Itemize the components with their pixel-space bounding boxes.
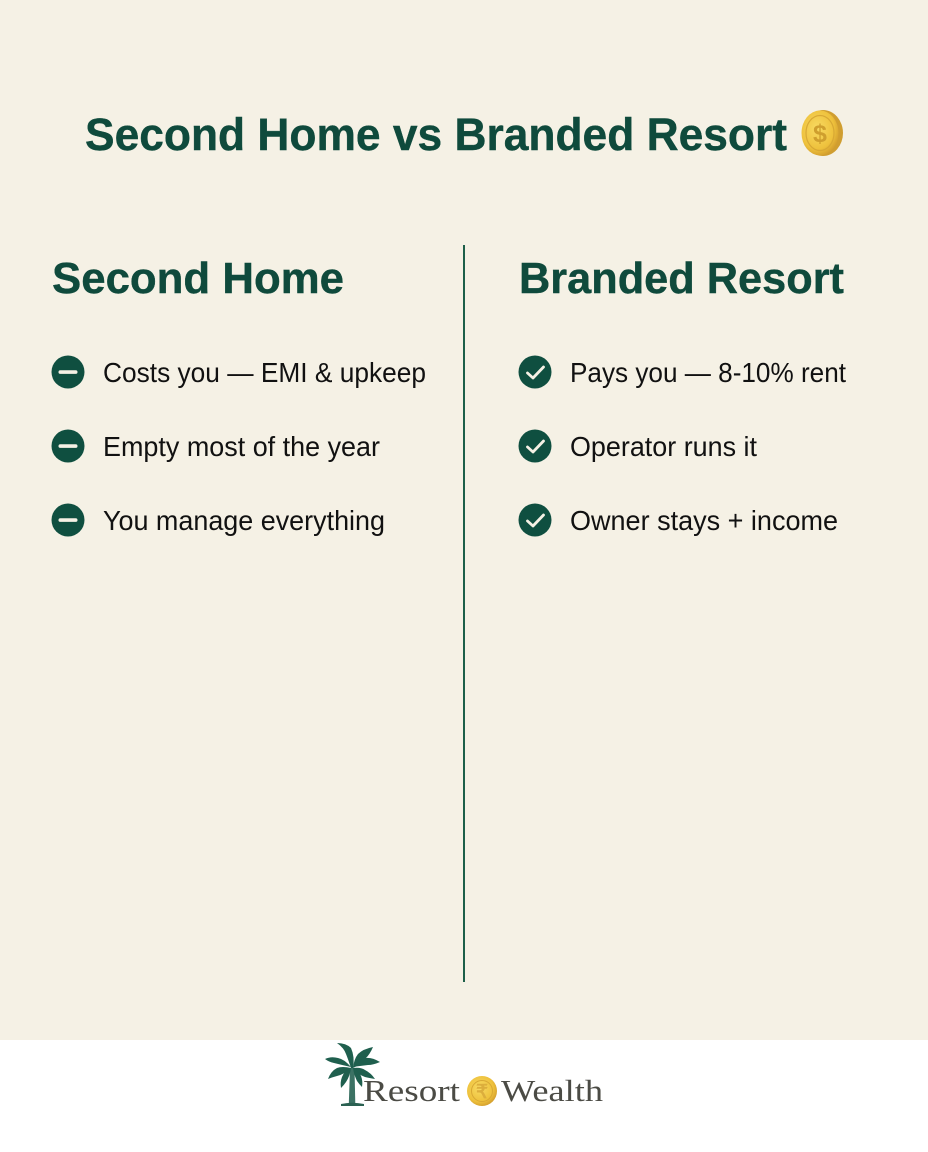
wordmark: resort: Resort xyxy=(363,1073,460,1108)
icon: palm tree xyxy=(325,1043,380,1106)
icon: rupee coin xyxy=(467,1076,497,1106)
heading: second home: Second Home xyxy=(52,254,344,303)
icon: rupee coin: ₹ xyxy=(476,1082,488,1103)
item: operator runs it: Operator runs it xyxy=(570,431,757,462)
panel: second home xyxy=(52,254,426,536)
heading: branded resort: Branded Resort xyxy=(519,254,844,303)
divider xyxy=(463,245,465,982)
logo: resort wealth xyxy=(325,1043,604,1108)
icon: gold dollar coin xyxy=(802,110,843,156)
item: owner stays: Owner stays + income xyxy=(570,505,838,536)
panel: branded resort xyxy=(518,254,846,536)
title: Second Home vs Branded Resort xyxy=(85,109,787,160)
wordmark: wealth: Wealth xyxy=(501,1073,604,1108)
item: you manage everything: You manage everything xyxy=(103,505,385,536)
item: costs you: Costs you — EMI & upkeep xyxy=(103,357,426,388)
icon: gold dollar coin: $ xyxy=(813,120,827,148)
item: empty most of the year: Empty most of the year xyxy=(103,431,380,462)
footer band xyxy=(0,1040,928,1152)
item: pays you: Pays you — 8-10% rent xyxy=(570,357,846,388)
